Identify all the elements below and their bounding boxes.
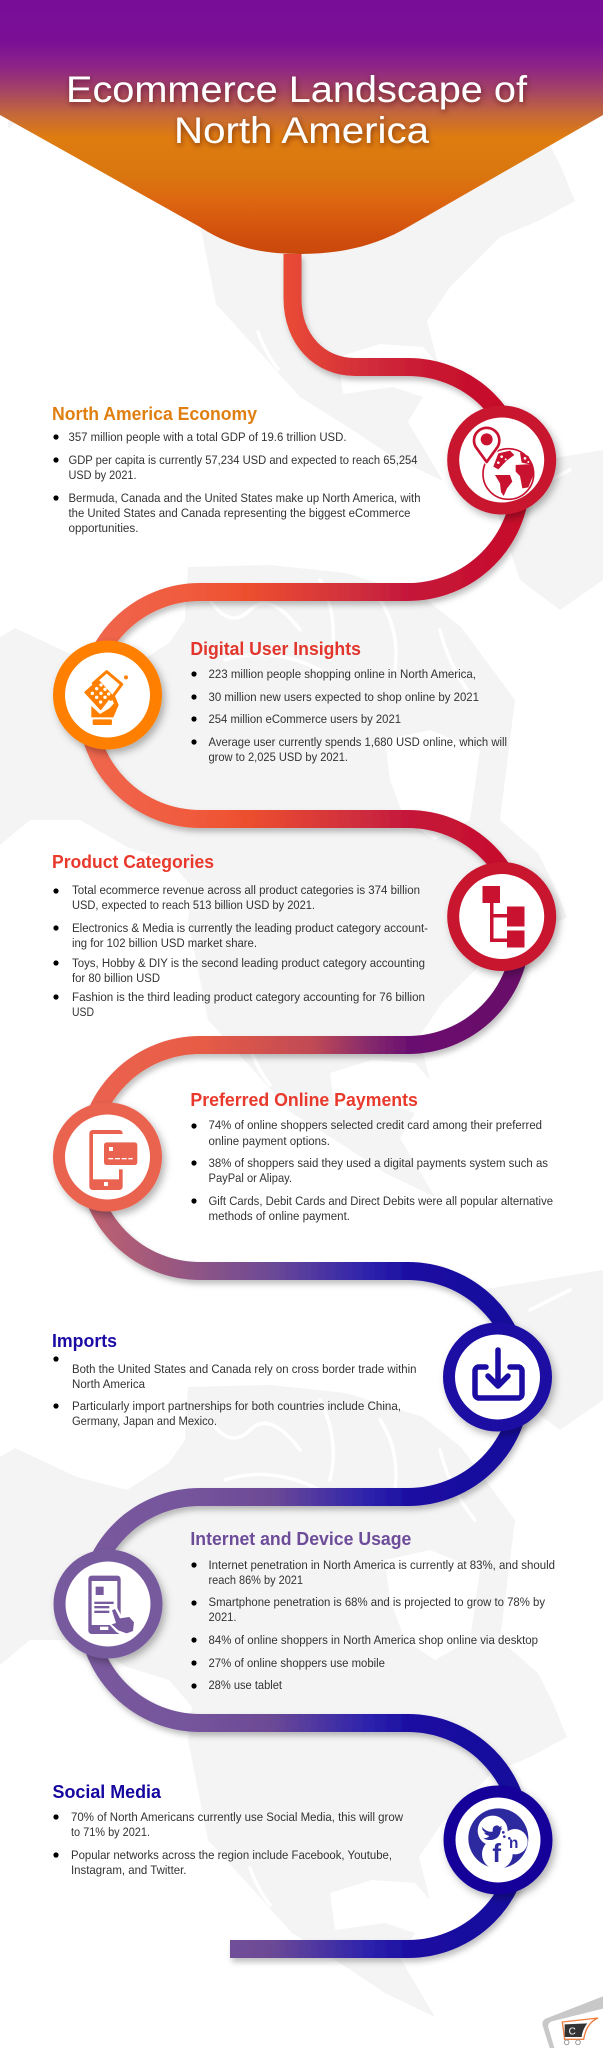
- bullet list: ing for 102 billion USD market share.: [72, 936, 257, 950]
- header banner: [0, 0, 603, 254]
- bullet list: [53, 1356, 417, 1428]
- title: Ecommerce Landscape of: [66, 68, 528, 110]
- panel: social media: [52, 1781, 403, 1877]
- bullet list: 223 million people shopping online in North America,: [208, 667, 476, 681]
- icon: category hierarchy: [447, 862, 556, 971]
- panel: imports: [52, 1330, 416, 1428]
- bullet list: 357 million people with a total GDP of 19.6 trillion USD.: [68, 430, 346, 444]
- panel: product categories: [52, 851, 428, 1019]
- logo: shopping cart badge: C: [569, 2026, 576, 2037]
- bullet list: Fashion is the third leading product category accounting for 76 billion: [72, 990, 425, 1004]
- icon: smartphone with tapping hand: [54, 1550, 162, 1658]
- bullet list: USD by 2021.: [68, 468, 136, 482]
- winding road connector: [87, 254, 521, 1949]
- bullet list: 38% of shoppers said they used a digital payments system such as: [208, 1156, 548, 1170]
- bullet list: 84% of online shoppers in North America shop online via desktop: [208, 1633, 538, 1647]
- bullet list: to 71% by 2021.: [71, 1825, 150, 1839]
- bullet list: Toys, Hobby & DIY is the second leading product category accounting: [72, 956, 425, 970]
- bullet list: online payment options.: [208, 1134, 330, 1148]
- title: North America: [174, 109, 429, 151]
- bullet list: [53, 1810, 403, 1877]
- bullet list: Germany, Japan and Mexico.: [72, 1414, 217, 1428]
- bullet list: Popular networks across the region include Facebook, Youtube,: [71, 1848, 392, 1862]
- bullet list: [53, 883, 428, 1019]
- title: [66, 68, 528, 151]
- bullet list: 254 million eCommerce users by 2021: [208, 712, 401, 726]
- bullet list: [191, 1558, 555, 1692]
- bullet list: North America: [72, 1377, 145, 1391]
- bullet list: Gift Cards, Debit Cards and Direct Debits were all popular alternative: [208, 1194, 553, 1208]
- icon: social networks: n: [509, 1835, 518, 1852]
- bullet list: for 80 billion USD: [72, 971, 160, 985]
- panel: north america economy: [52, 403, 420, 535]
- heading: Preferred Online Payments: [190, 1089, 418, 1110]
- bullet list: 28% use tablet: [208, 1678, 283, 1692]
- bullet list: Internet penetration in North America is currently at 83%, and should: [208, 1558, 555, 1572]
- icon: location pin and globe: [447, 406, 556, 514]
- bullet list: Electronics & Media is currently the leading product category account-: [72, 921, 428, 935]
- bullet list: [53, 430, 421, 535]
- bullet list: grow to 2,025 USD by 2021.: [208, 750, 348, 764]
- bullet list: 70% of North Americans currently use Social Media, this will grow: [71, 1810, 403, 1824]
- bullet list: GDP per capita is currently 57,234 USD and expected to reach 65,254: [68, 453, 418, 467]
- bullet list: 74% of online shoppers selected credit card among their preferred: [208, 1118, 542, 1132]
- panel: digital user insights: [190, 638, 507, 764]
- heading: Social Media: [52, 1781, 162, 1802]
- icon: phone with payment card: [53, 1102, 162, 1212]
- heading: Digital User Insights: [190, 638, 361, 659]
- bullet list: Average user currently spends 1,680 USD online, which will: [208, 735, 507, 749]
- bullet list: USD, expected to reach 513 billion USD by 2021.: [72, 898, 315, 912]
- bullet list: the United States and Canada representing the biggest eCommerce: [68, 506, 411, 520]
- bullet list: Smartphone penetration is 68% and is projected to grow to 78% by: [208, 1595, 546, 1609]
- heading: Internet and Device Usage: [190, 1528, 411, 1549]
- bullet list: PayPal or Alipay.: [208, 1171, 292, 1185]
- bullet list: Instagram, and Twitter.: [71, 1863, 186, 1877]
- bullet list: Particularly import partnerships for both countries include China,: [72, 1399, 401, 1413]
- icon: phone in hand: [53, 640, 162, 750]
- bullet list: USD: [72, 1005, 94, 1019]
- bullet list: 30 million new users expected to shop online by 2021: [208, 690, 479, 704]
- bullet list: Bermuda, Canada and the United States make up North America, with: [68, 491, 420, 505]
- icon: social networks: [444, 1786, 552, 1894]
- bullet list: [191, 1118, 553, 1223]
- bullet list: [191, 667, 507, 764]
- bullet list: opportunities.: [68, 521, 138, 535]
- heading: Product Categories: [52, 851, 214, 872]
- bullet list: Both the United States and Canada rely on cross border trade within: [72, 1362, 416, 1376]
- panel: preferred online payments: [190, 1089, 553, 1223]
- heading: Imports: [52, 1330, 117, 1351]
- icon: social networks: f: [492, 1838, 501, 1868]
- bullet list: methods of online payment.: [208, 1209, 350, 1223]
- logo: shopping cart badge: [542, 1996, 603, 2048]
- bullet list: 27% of online shoppers use mobile: [208, 1656, 385, 1670]
- icon: import download tray: [443, 1322, 552, 1432]
- bullet list: 2021.: [208, 1610, 236, 1624]
- panel: internet and device usage: [190, 1528, 555, 1692]
- bullet list: reach 86% by 2021: [208, 1573, 303, 1587]
- heading: North America Economy: [52, 403, 258, 424]
- bullet list: Total ecommerce revenue across all product categories is 374 billion: [72, 883, 420, 897]
